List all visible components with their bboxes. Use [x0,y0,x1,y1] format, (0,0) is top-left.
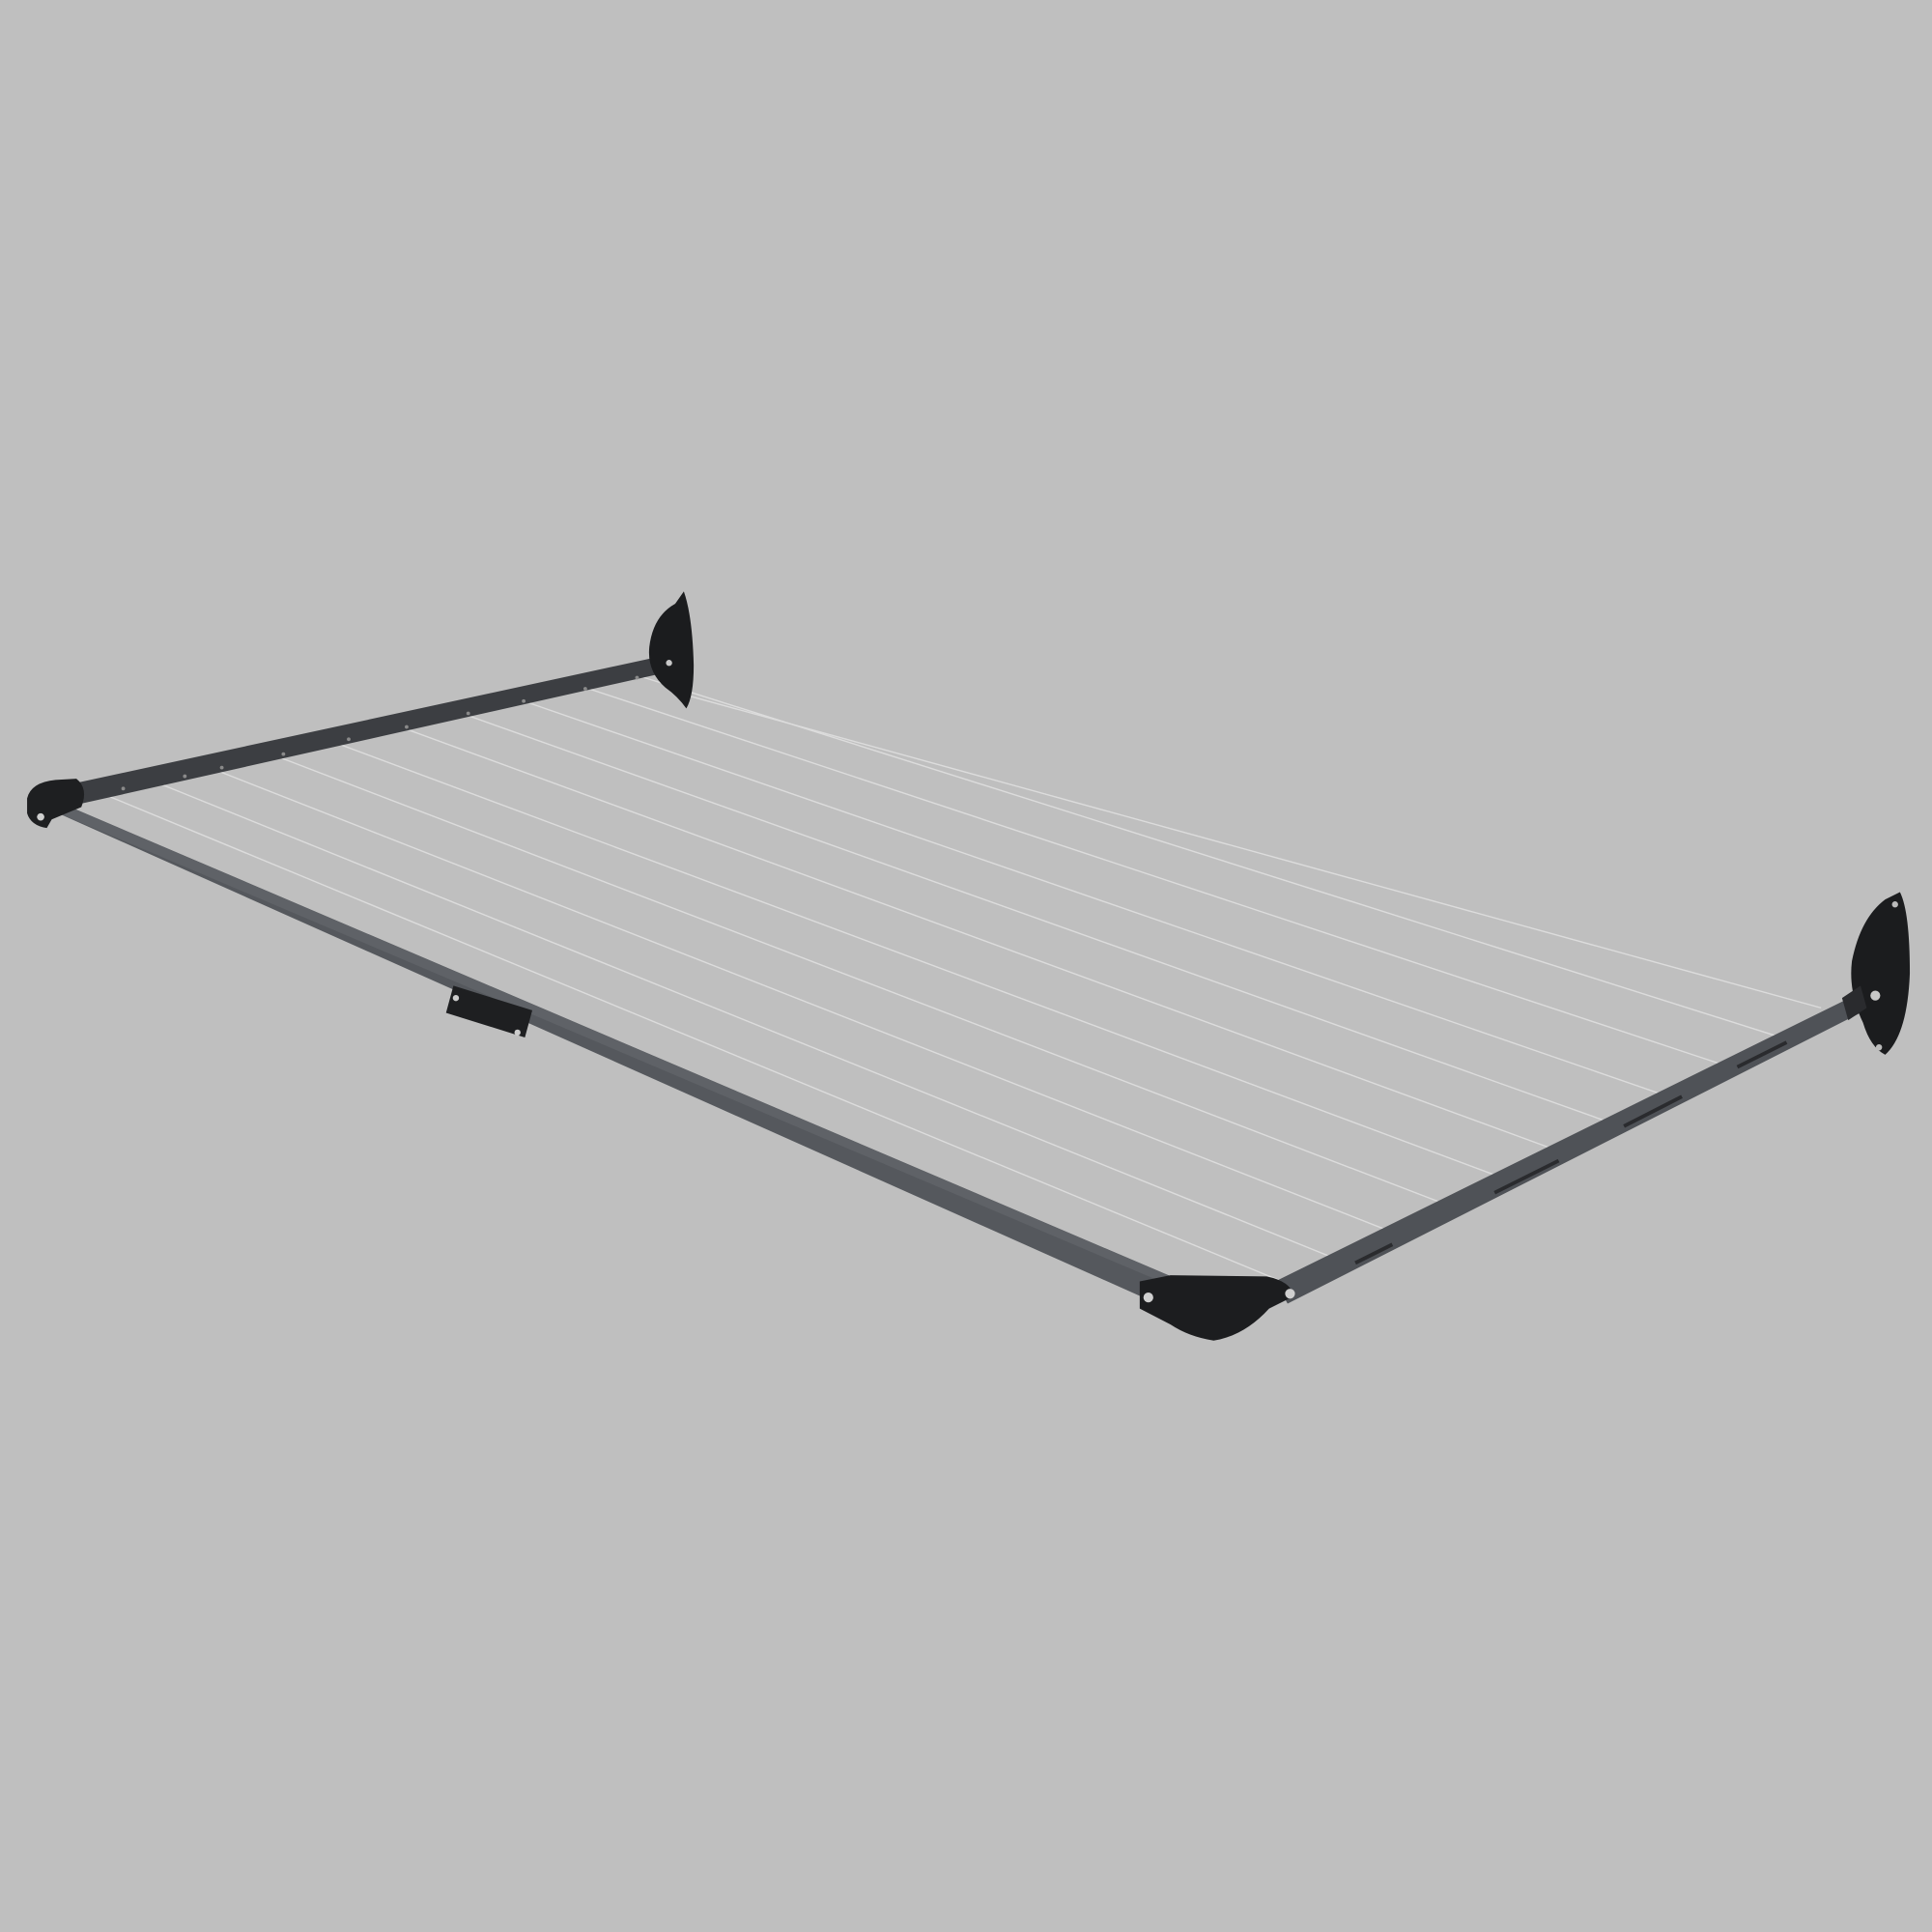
hinge [446,985,532,1037]
right bar slots [1355,1042,1786,1263]
washing lines [96,676,1821,1287]
clothesline frame [27,591,1910,1341]
back bar [62,658,659,806]
left corner cap [27,779,84,828]
back bar line holes [122,676,639,790]
left side bar [44,804,1182,1309]
right front bar [1275,996,1861,1303]
left wall mount [649,591,694,708]
right wall mount [1851,892,1910,1055]
front corner cap [1140,1275,1293,1341]
